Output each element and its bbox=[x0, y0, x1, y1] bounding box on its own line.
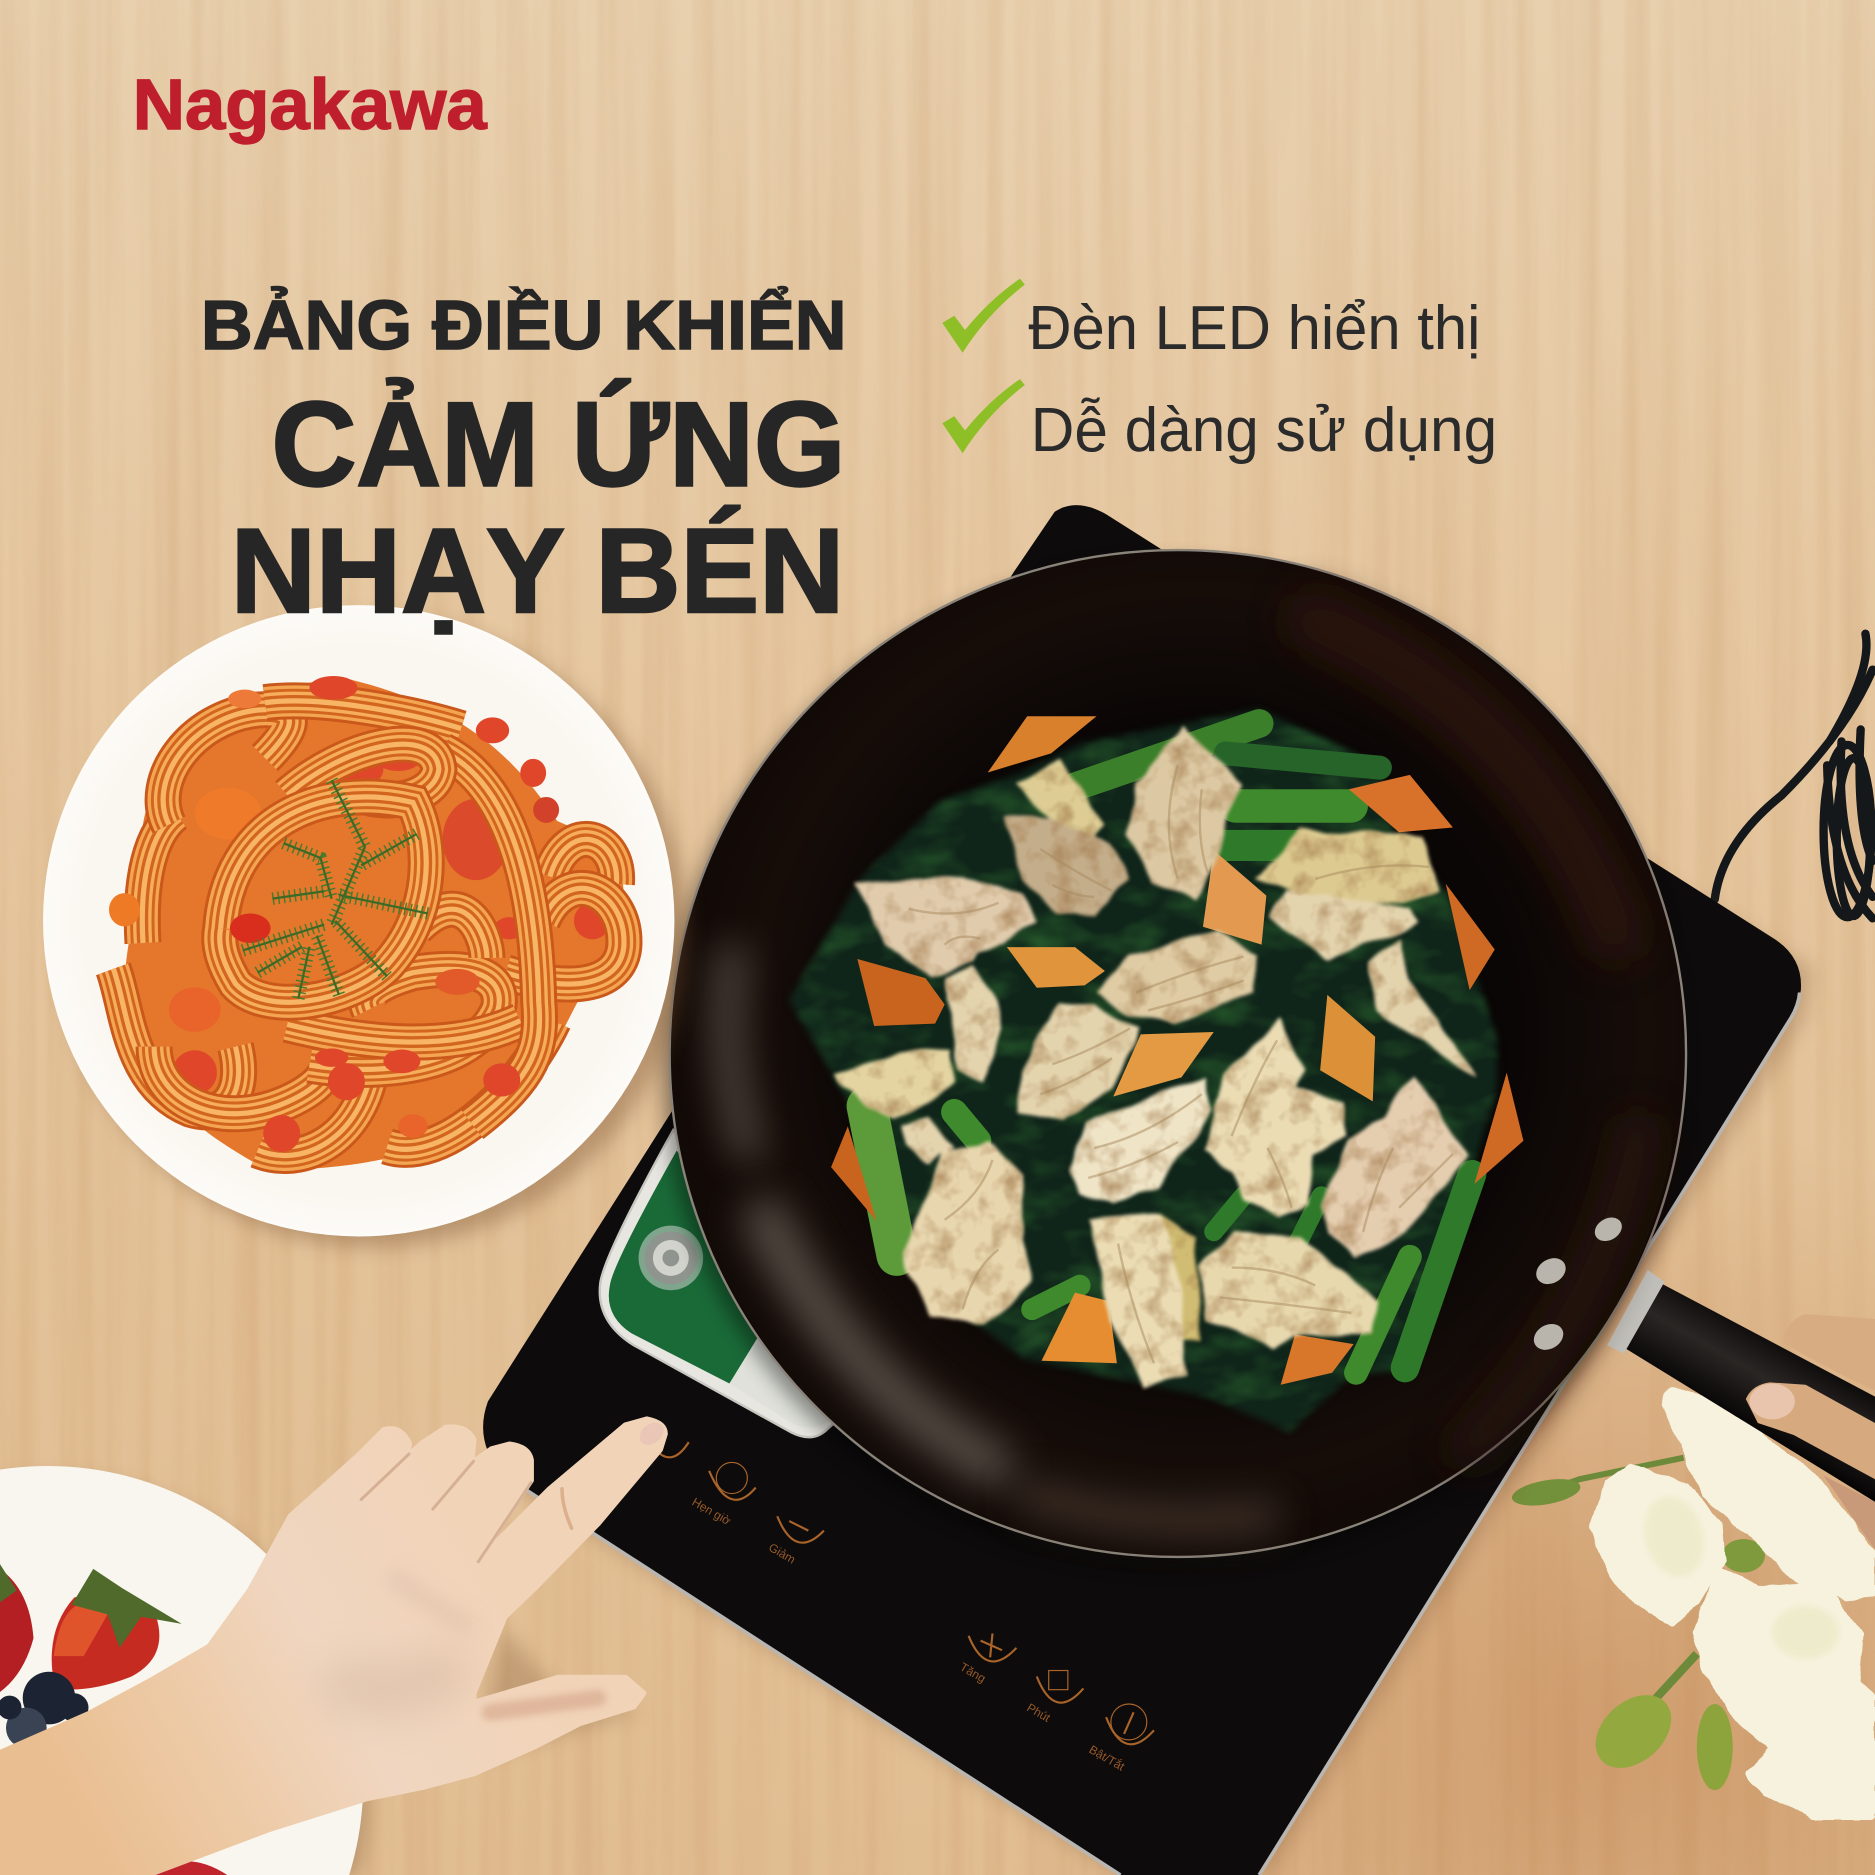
control panel border bbox=[600, 1130, 861, 1437]
power cord bbox=[1715, 634, 1873, 918]
right hand on handle bbox=[1746, 1314, 1875, 1550]
hand shading bbox=[347, 1454, 598, 1712]
cooktop silver edge bbox=[502, 993, 1800, 1875]
hand shadow bbox=[478, 1626, 646, 1758]
button: power bbox=[1106, 1704, 1154, 1744]
pan shadow bbox=[662, 562, 1681, 1566]
icon: green check 2 bbox=[942, 379, 1025, 453]
thumb bbox=[1746, 1382, 1875, 1479]
control panel light grey corner bbox=[729, 1342, 837, 1428]
button: timer bbox=[709, 1462, 756, 1500]
icon: green check 1 bbox=[942, 279, 1025, 353]
cooktop body bbox=[483, 505, 1801, 1875]
panel display dial bbox=[639, 1226, 703, 1290]
heading line 1: BẢNG ĐIỀU KHIỂN bbox=[201, 286, 847, 364]
strand bundles bbox=[113, 701, 624, 1156]
strawberry left bbox=[0, 1564, 33, 1692]
spaghetti bbox=[109, 676, 624, 1169]
plate bbox=[43, 605, 674, 1236]
touch button labels bbox=[690, 1495, 1128, 1774]
logo: Nagakawa: Nagakawa bbox=[133, 65, 488, 145]
pan bowl bbox=[670, 550, 1686, 1557]
plate shadow bbox=[0, 1478, 369, 1875]
strawberry bottom bbox=[149, 1861, 227, 1875]
fruit plate bbox=[0, 1466, 369, 1875]
carrot slices bbox=[831, 716, 1523, 1385]
feature list bbox=[942, 279, 1497, 465]
blueberries bbox=[0, 1672, 88, 1748]
thumbnail bbox=[1749, 1384, 1795, 1419]
label: Phút: Phút bbox=[1024, 1700, 1053, 1725]
label: Tăng: Tăng bbox=[958, 1660, 988, 1686]
plate shadow bbox=[59, 618, 688, 1247]
fingernail bbox=[635, 1418, 668, 1449]
hand bbox=[0, 1419, 665, 1875]
stir-fry food bbox=[789, 709, 1523, 1431]
pan rivets bbox=[1529, 1213, 1626, 1355]
cooktop shadow bbox=[502, 717, 1813, 1875]
upper finger bbox=[1783, 1314, 1875, 1391]
feature 1 text: Đèn LED hiển thị bbox=[1028, 294, 1480, 363]
spaghetti base bbox=[125, 677, 624, 1169]
flower petal shading bbox=[1636, 1490, 1839, 1659]
pan brushed highlights bbox=[727, 622, 1638, 1520]
herb garnish bbox=[243, 780, 428, 999]
label: Bật/Tắt: Bật/Tắt bbox=[1087, 1741, 1128, 1774]
button: minutes bbox=[1037, 1671, 1083, 1703]
green stems bbox=[867, 723, 1472, 1373]
induction cooktop bbox=[483, 505, 1813, 1875]
feature 2 text: Dễ dàng sử dụng bbox=[1031, 396, 1497, 465]
plate bbox=[0, 1466, 363, 1875]
dark green leaves base bbox=[789, 709, 1497, 1431]
flower stems and buds bbox=[1510, 1458, 1765, 1790]
button: left bbox=[655, 1442, 689, 1457]
chicken pieces bbox=[833, 726, 1477, 1390]
heading line 2: CẢM ỨNG bbox=[271, 378, 845, 511]
button: increase bbox=[969, 1633, 1016, 1661]
strawberry bbox=[52, 1569, 182, 1690]
lower palm bbox=[1824, 1476, 1875, 1550]
heading: touch control panel bbox=[201, 286, 847, 638]
label: Hẹn giờ: Hẹn giờ bbox=[690, 1495, 733, 1528]
hand on the touch panel bbox=[0, 1418, 668, 1875]
button: decrease bbox=[777, 1516, 824, 1543]
touch buttons bbox=[655, 1442, 1154, 1744]
tomato pieces over strands bbox=[109, 676, 559, 1152]
flowers bbox=[1510, 1391, 1871, 1816]
wok pan bbox=[662, 550, 1875, 1566]
spaghetti plate bbox=[43, 605, 688, 1247]
tomato pieces under strands bbox=[169, 738, 611, 1095]
heading line 3: NHẠY BÉN bbox=[231, 505, 844, 638]
label: Giảm: Giảm bbox=[766, 1540, 798, 1567]
chicken fold lines bbox=[909, 765, 1453, 1363]
white flower heads bbox=[1593, 1391, 1871, 1816]
control panel green fill bbox=[609, 1150, 771, 1384]
pan handle bbox=[1607, 1270, 1875, 1502]
